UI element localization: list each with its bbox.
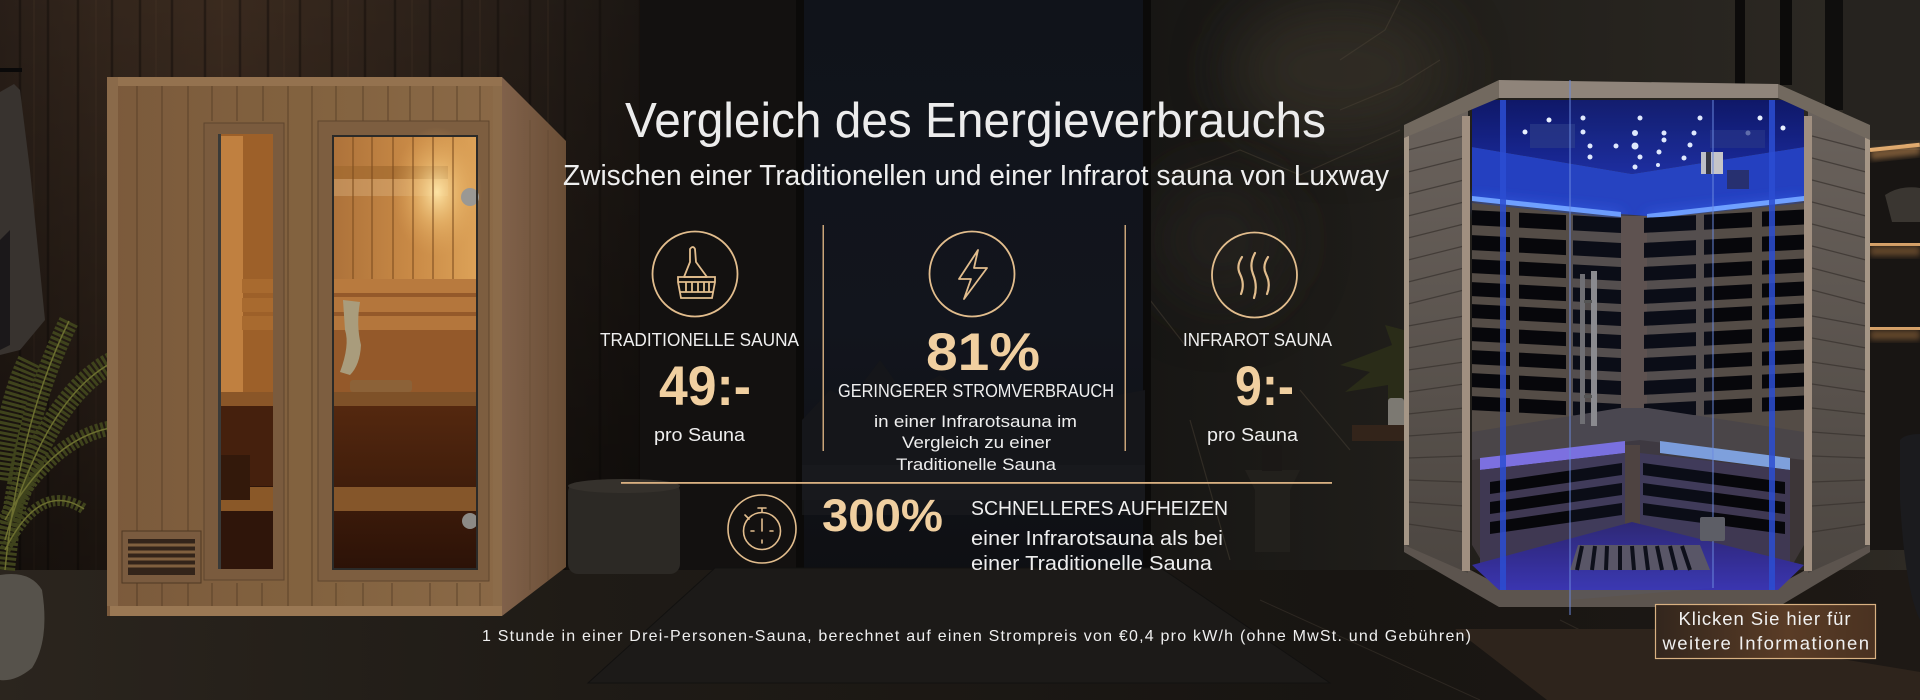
description: savings comparison: Traditionelle Sauna <box>896 456 1057 474</box>
infrared sauna: top cap <box>1404 80 1870 140</box>
plant and pot <box>0 321 130 680</box>
traditional sauna <box>107 77 566 616</box>
icon: sauna bucket with ladle <box>652 232 738 316</box>
traditional sauna: narrow window frame <box>204 123 284 580</box>
infrared sauna: lower hinge <box>1700 517 1725 541</box>
description: savings comparison: in einer Infrarotsauna im <box>874 413 1077 431</box>
button: more information: weitere Informationen <box>1662 632 1869 654</box>
infrared sauna: left side wall <box>1404 108 1470 573</box>
infrared sauna: interior back <box>1472 100 1804 590</box>
label: infrared sauna: INFRAROT SAUNA <box>1183 330 1332 350</box>
infrared sauna <box>1404 80 1870 615</box>
background: round tub <box>568 479 680 574</box>
label: faster heating: SCHNELLERES AUFHEIZEN <box>971 498 1228 520</box>
infrared sauna: glass door edges <box>1500 80 1775 615</box>
subtitle: Zwischen einer Traditionellen und einer Infrarot sauna von Luxway <box>563 160 1389 192</box>
value: 300 percent: 300% <box>822 490 943 541</box>
column: traditional sauna <box>600 232 799 445</box>
infrared sauna: LED strip lower <box>1480 441 1790 470</box>
icon: stopwatch <box>728 495 796 563</box>
infrared sauna: right side wall <box>1804 108 1870 573</box>
background: small plant behind infrared sauna <box>1340 325 1404 441</box>
title: Vergleich des Energieverbrauchs <box>625 94 1326 148</box>
description: savings comparison <box>874 413 1077 474</box>
background: stool with bottles <box>1245 445 1300 552</box>
towel on hook <box>0 68 45 355</box>
infrared sauna: bench <box>1472 408 1804 460</box>
infrared sauna: LED strip upper <box>1472 196 1804 222</box>
icon: lightning bolt <box>930 232 1014 316</box>
traditional sauna: narrow window glass <box>218 134 273 569</box>
traditional sauna: front panel <box>107 77 502 616</box>
value: 49 per sauna: 49:- <box>659 354 751 417</box>
infrared sauna: base plinth <box>1404 535 1870 607</box>
infrared sauna: ceiling with starlights <box>1472 100 1804 189</box>
background: central dark window <box>640 0 1151 600</box>
unit: pro Sauna: pro Sauna <box>1207 425 1299 445</box>
traditional sauna: door glass with interior <box>333 127 482 569</box>
button: more information: Klicken Sie hier für <box>1678 608 1850 629</box>
traditional sauna: side wall <box>502 77 566 616</box>
infrared sauna: blue wall band <box>1472 147 1804 216</box>
traditional sauna: top lip and base <box>107 77 502 616</box>
value: 9 per sauna: 9:- <box>1235 354 1294 417</box>
label: traditional sauna: TRADITIONELLE SAUNA <box>600 330 799 350</box>
background: brown rug right <box>1455 629 1920 700</box>
description: faster heating: einer Infrarotsauna als bei <box>971 528 1223 550</box>
footnote: 1 Stunde in einer Drei-Personen-Sauna, berechnet auf einen Strompreis von €0,4 pro kW/h (ohne MwSt. und Gebühren) <box>482 628 1471 645</box>
divider right <box>1124 225 1126 451</box>
unit: pro Sauna: pro Sauna <box>654 425 746 445</box>
background: toilet <box>1900 434 1920 620</box>
description: faster heating <box>971 528 1223 575</box>
traditional sauna: air vent <box>122 531 201 583</box>
infrared sauna: heating panels <box>1472 203 1804 432</box>
horizontal divider <box>621 482 1332 484</box>
value: 81 percent: 81% <box>926 323 1040 382</box>
background: dark marble wall right <box>1145 0 1920 600</box>
row: faster heating <box>728 490 1228 575</box>
background: floor <box>0 570 1920 700</box>
infrared sauna: door handle <box>1580 271 1597 426</box>
background: wooden wall left <box>0 0 800 600</box>
description: savings comparison: Vergleich zu einer <box>902 434 1052 452</box>
traditional sauna: plank lines <box>137 86 548 606</box>
icon: heat waves <box>1212 232 1297 318</box>
button: more information <box>1656 604 1876 658</box>
background: LED shelves right <box>1870 143 1920 340</box>
infrared sauna: floor with duckboard <box>1472 522 1804 590</box>
column: infrared sauna <box>1183 232 1332 445</box>
infrared sauna: lower panels <box>1480 445 1790 565</box>
description: faster heating: einer Traditionelle Sauna <box>971 553 1213 575</box>
divider left <box>822 225 824 451</box>
column: savings <box>838 232 1114 474</box>
traditional sauna: door frame <box>318 121 489 581</box>
label: lower power consumption: GERINGERER STROMVERBRAUCH <box>838 381 1114 401</box>
background: dark rug <box>588 568 1330 683</box>
